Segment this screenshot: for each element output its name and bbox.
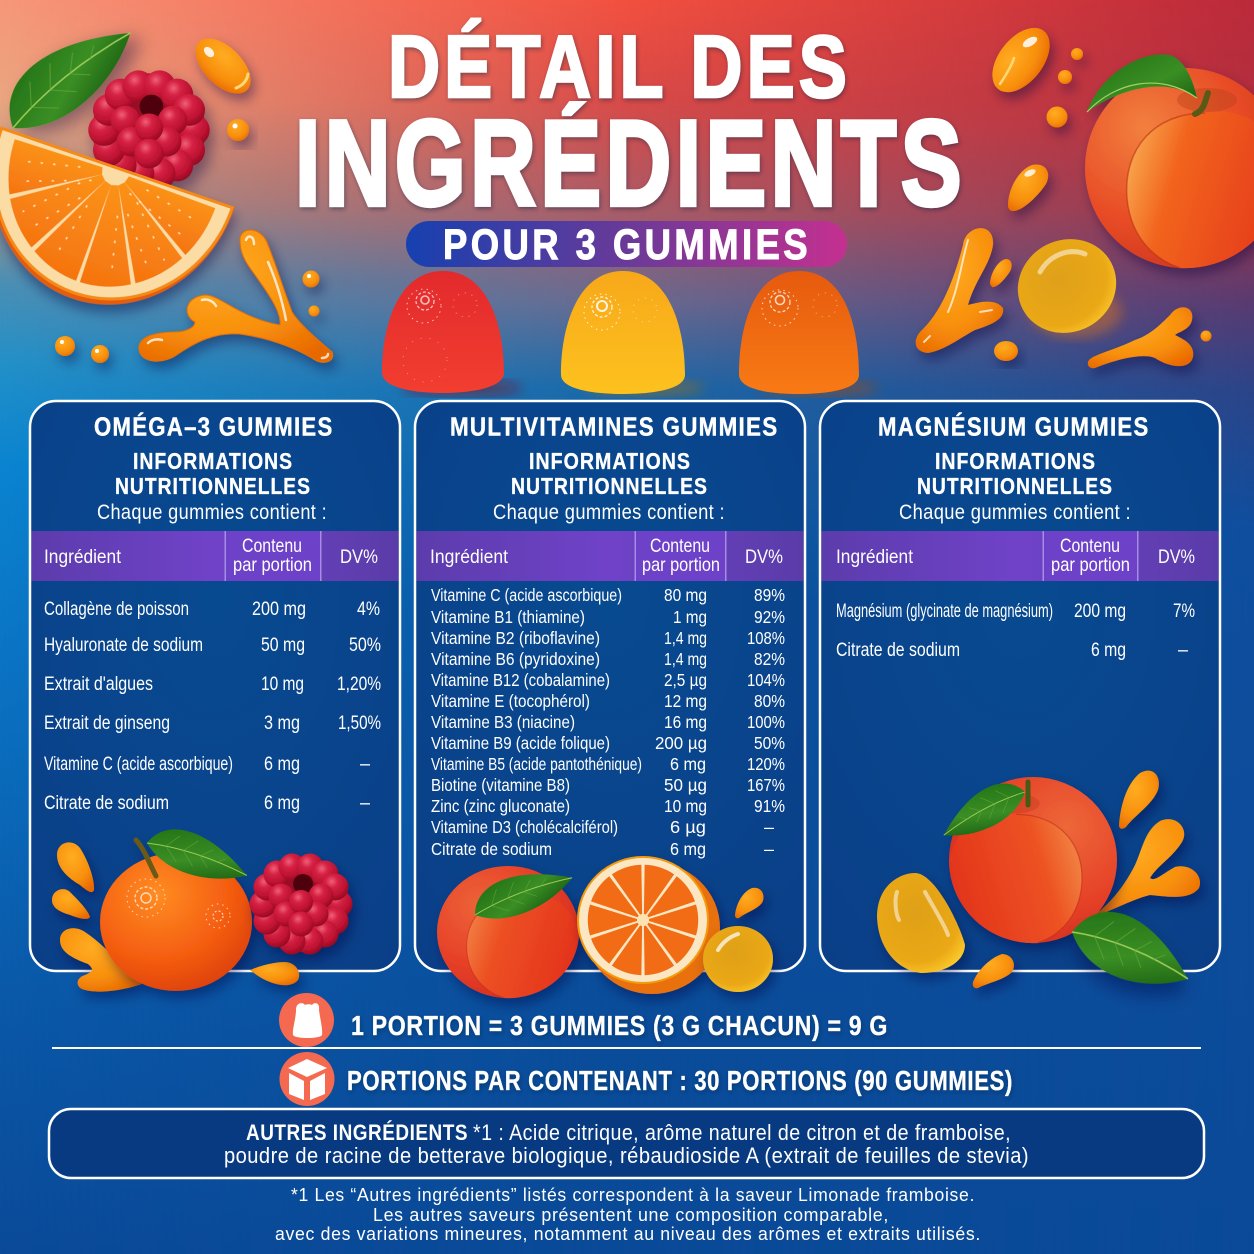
- table rows: 50 mg: [261, 635, 305, 656]
- icon: leaf on peach: [934, 773, 1032, 848]
- table rows: Vitamine E (tocophérol): [431, 691, 590, 711]
- table header: Contenu: [242, 535, 302, 557]
- icon: raspberry: [250, 854, 352, 954]
- icon: box badge: [280, 1052, 334, 1106]
- footnote: *1 Les “Autres ingrédients” listés correspondent à la saveur Limonade framboise.: [291, 1184, 975, 1205]
- portions per container line: [280, 1052, 1013, 1106]
- table rows: –: [360, 793, 370, 814]
- table rows: –: [764, 839, 774, 859]
- table header: [32, 531, 398, 581]
- table header: par portion: [233, 554, 312, 576]
- table rows: 6 mg: [1091, 640, 1126, 661]
- table header: DV%: [745, 546, 783, 568]
- table header: [822, 531, 1218, 581]
- panel subheading: [917, 448, 1113, 499]
- table rows: Vitamine B6 (pyridoxine): [431, 649, 600, 669]
- container text: PORTIONS PAR CONTENANT : 30 PORTIONS (90 GUMMIES): [347, 1065, 1013, 1096]
- table header: Ingrédient: [430, 546, 509, 568]
- table rows: Biotine (vitamine B8): [431, 775, 570, 795]
- icon: droplet: [227, 119, 249, 141]
- icon: droplet bottom: [994, 341, 1018, 361]
- icon: capsule top left: [186, 29, 260, 103]
- table rows: 200 mg: [252, 599, 306, 620]
- table rows: 89%: [754, 585, 785, 605]
- table rows: 2,5 µg: [664, 670, 707, 690]
- title line 1: DÉTAIL DES: [388, 17, 851, 116]
- icon: raspberry top left: [88, 70, 210, 190]
- title line 2: INGRÉDIENTS: [295, 95, 966, 231]
- table rows: Vitamine C (acide ascorbique): [431, 585, 622, 605]
- table rows: 80 mg: [664, 585, 707, 605]
- icon: teardrop: [735, 888, 764, 918]
- panel subheading: INFORMATIONS: [529, 448, 691, 474]
- table rows: 1,4 mg: [664, 628, 707, 648]
- title: [295, 17, 966, 231]
- panel subheading: INFORMATIONS: [133, 448, 293, 474]
- table rows: 200 mg: [1074, 601, 1126, 622]
- table rows: [431, 585, 785, 859]
- table rows: Citrate de sodium: [44, 793, 169, 814]
- table rows: Citrate de sodium: [431, 839, 552, 859]
- table rows: Extrait d'algues: [44, 674, 153, 695]
- illustration: fruits top right: [916, 17, 1254, 368]
- table rows: Zinc (zinc gluconate): [431, 796, 570, 816]
- table rows: 10 mg: [261, 674, 304, 695]
- table rows: 200 µg: [655, 733, 707, 753]
- table header: DV%: [340, 546, 378, 568]
- illustration: three gummies: [382, 271, 878, 396]
- table rows: 92%: [754, 607, 785, 627]
- table rows: 4%: [357, 599, 380, 620]
- table rows: Magnésium (glycinate de magnésium): [836, 601, 1053, 622]
- other ingredients box: [49, 1109, 1204, 1178]
- table rows: 6 mg: [670, 839, 706, 859]
- table header: [416, 531, 804, 581]
- panel heading: MULTIVITAMINES GUMMIES: [450, 412, 778, 442]
- table rows: 1,50%: [338, 713, 381, 734]
- icon: splash: [1090, 819, 1200, 918]
- table rows: 80%: [754, 691, 785, 711]
- table rows: 6 mg: [264, 754, 300, 775]
- table rows: 108%: [747, 628, 785, 648]
- portion text: 1 PORTION = 3 GUMMIES (3 G CHACUN) = 9 G: [351, 1010, 888, 1041]
- icon: small droplet far right: [1200, 330, 1212, 342]
- icon: bottom teardrop: [973, 954, 1014, 988]
- icon: teardrops: [52, 842, 299, 992]
- table header: Ingrédient: [44, 546, 122, 568]
- table rows: 50%: [754, 733, 785, 753]
- icon: small droplets left: [55, 270, 320, 363]
- table rows: 16 mg: [664, 712, 707, 732]
- table header: par portion: [642, 554, 720, 576]
- panel subheading: INFORMATIONS: [935, 448, 1096, 474]
- table rows: 1,4 mg: [664, 649, 707, 669]
- icon: amber splash lower right: [1088, 307, 1193, 368]
- icon: orange half: [578, 857, 720, 994]
- panel intro: Chaque gummies contient :: [493, 501, 725, 524]
- illustration: panel 2 fruits: [437, 856, 773, 998]
- other ingredients box: poudre de racine de betterave biologique, rébaudioside A (extrait de feuilles de stevia): [224, 1143, 1029, 1168]
- table rows: 50%: [349, 635, 381, 656]
- table rows: 120%: [747, 754, 785, 774]
- other ingredients box: AUTRES INGRÉDIENTS: [246, 1120, 468, 1145]
- table rows: [836, 601, 1195, 661]
- table rows: 100%: [747, 712, 785, 732]
- table rows: 1 mg: [673, 607, 707, 627]
- portion line: [279, 993, 888, 1047]
- table rows: Vitamine D3 (cholécalciférol): [431, 817, 618, 837]
- icon: tiny teardrop: [990, 259, 1012, 287]
- panel heading: OMÉGA–3 GUMMIES: [94, 412, 334, 442]
- footnote: [275, 1184, 981, 1244]
- illustration: panel 1 fruits: [52, 820, 352, 992]
- table rows: Vitamine B1 (thiamine): [431, 607, 585, 627]
- panel: Oméga-3 gummies: [30, 401, 400, 971]
- table rows: 6 mg: [670, 754, 706, 774]
- table rows: –: [1178, 640, 1188, 661]
- panel: Multivitamines gummies: [415, 401, 805, 971]
- table header: Ingrédient: [836, 546, 914, 568]
- icon: yellow gel capsule: [1001, 222, 1133, 350]
- table header: Contenu: [650, 535, 710, 557]
- table rows: 1,20%: [337, 674, 381, 695]
- panel subheading: NUTRITIONNELLES: [115, 473, 311, 499]
- table header: Contenu: [1060, 535, 1120, 557]
- table rows: 10 mg: [664, 796, 707, 816]
- icon: amber splash left: [139, 230, 333, 362]
- panel: Magnésium gummies: [820, 401, 1220, 971]
- icon: bottom leaf: [1063, 899, 1201, 1002]
- table rows: Vitamine B9 (acide folique): [431, 733, 610, 753]
- table rows: –: [764, 817, 774, 837]
- table rows: Extrait de ginseng: [44, 713, 170, 734]
- icon: gummy bear badge: [279, 993, 334, 1047]
- table rows: Vitamine B2 (riboflavine): [431, 628, 600, 648]
- icon: yellow gummy: [561, 271, 705, 396]
- panel subheading: NUTRITIONNELLES: [511, 473, 708, 499]
- icon: teardrop right: [1008, 164, 1048, 211]
- table rows: Vitamine C (acide ascorbique): [44, 754, 233, 775]
- icon: amber splash right: [916, 228, 1003, 353]
- illustration: panel 3 fruits: [877, 771, 1201, 1002]
- panel intro: Chaque gummies contient :: [97, 501, 327, 524]
- table rows: Vitamine B5 (acide pantothénique): [431, 754, 642, 774]
- footnote: Les autres saveurs présentent une composition comparable,: [373, 1204, 889, 1225]
- icon: peach: [437, 866, 579, 998]
- icon: gel capsule: [703, 926, 773, 992]
- footnote: avec des variations mineures, notamment au niveau des arômes et extraits utilisés.: [275, 1223, 981, 1244]
- panel subheading: [511, 448, 708, 499]
- table header: DV%: [1158, 546, 1195, 568]
- icon: leaf: [142, 820, 254, 891]
- icon: leaf: [467, 856, 578, 930]
- table rows: 7%: [1173, 601, 1195, 622]
- icon: leaf top left: [0, 5, 146, 147]
- table rows: 50 µg: [664, 775, 707, 795]
- table rows: [44, 599, 381, 814]
- icon: small droplets right top: [1046, 48, 1083, 128]
- table rows: 12 mg: [664, 691, 707, 711]
- table rows: Hyaluronate de sodium: [44, 635, 203, 656]
- icon: capsule top right: [981, 17, 1061, 103]
- table rows: –: [360, 754, 370, 775]
- icon: red gummy: [382, 271, 522, 396]
- subtitle pill: POUR 3 GUMMIES: [443, 221, 811, 269]
- table rows: Citrate de sodium: [836, 640, 960, 661]
- icon: gel gummy: [877, 873, 965, 973]
- panel heading: MAGNÉSIUM GUMMIES: [878, 412, 1150, 442]
- other ingredients box: *1 : Acide citrique, arôme naturel de citron et de framboise,: [473, 1120, 1011, 1145]
- panel subheading: [115, 448, 311, 499]
- panel intro: Chaque gummies contient :: [899, 501, 1131, 524]
- panel subheading: NUTRITIONNELLES: [917, 473, 1113, 499]
- table rows: 6 mg: [264, 793, 300, 814]
- icon: peach: [949, 777, 1117, 943]
- table header: par portion: [1051, 554, 1130, 576]
- table rows: 167%: [747, 775, 785, 795]
- illustration: fruits top left: [0, 5, 333, 363]
- icon: tangerine: [100, 840, 252, 991]
- table rows: 3 mg: [264, 713, 300, 734]
- table rows: Vitamine B3 (niacine): [431, 712, 575, 732]
- table rows: Collagène de poisson: [44, 599, 189, 620]
- table rows: 104%: [747, 670, 785, 690]
- table rows: Vitamine B12 (cobalamine): [431, 670, 610, 690]
- icon: peach top right: [1085, 54, 1254, 268]
- table rows: 6 µg: [670, 817, 706, 837]
- icon: orange wedge: [0, 128, 234, 339]
- table rows: 91%: [754, 796, 785, 816]
- table rows: 82%: [754, 649, 785, 669]
- icon: teardrop: [1119, 771, 1159, 829]
- icon: orange gummy: [739, 271, 878, 396]
